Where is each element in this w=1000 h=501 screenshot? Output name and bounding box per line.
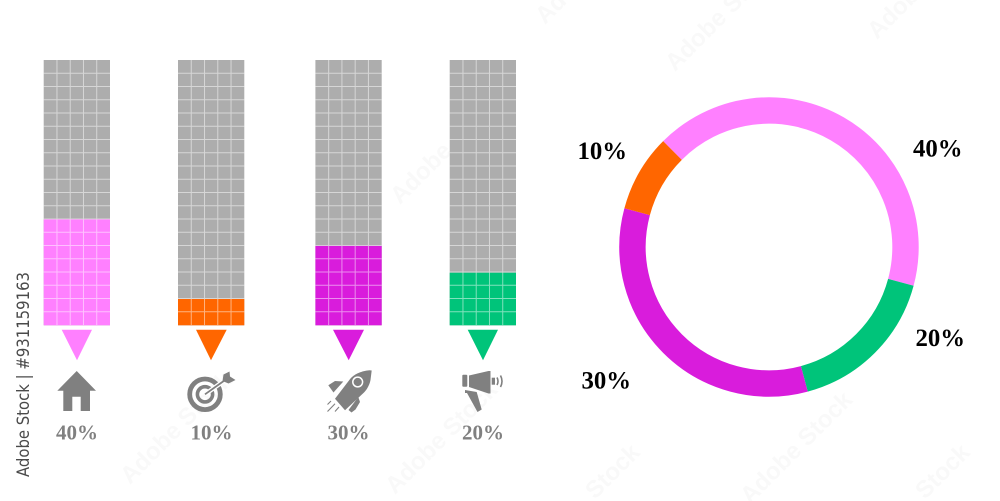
pointer: green triangle bbox=[468, 330, 498, 360]
pointer: magenta triangle bbox=[333, 330, 364, 360]
icon: rocket bbox=[328, 370, 372, 412]
segment: orange 10% bbox=[637, 150, 672, 212]
value label: 40%: 40% bbox=[56, 420, 98, 444]
icon: megaphone bbox=[462, 371, 502, 412]
bar: home track and fill bbox=[44, 60, 110, 325]
segment: magenta 30% bbox=[632, 212, 804, 384]
icon: house bbox=[57, 371, 96, 411]
icon: target with arrow bbox=[190, 372, 236, 410]
segment: green 20% bbox=[804, 282, 901, 379]
donut label: 30%: 30% bbox=[582, 368, 631, 395]
side credit: stock id: Adobe Stock | #931159163 bbox=[14, 272, 34, 477]
watermark: repeated faint stock text: Adobe Stock bbox=[115, 366, 238, 489]
donut label: 20%: 20% bbox=[916, 325, 965, 352]
pointer: orange triangle bbox=[196, 330, 227, 360]
value label: 30%: 30% bbox=[328, 420, 370, 444]
column: rocket 30% bbox=[315, 60, 382, 444]
column: target 10% bbox=[178, 60, 244, 444]
bar: megaphone track and fill bbox=[450, 60, 516, 325]
donut chart bbox=[632, 110, 906, 384]
watermark: repeated faint stock text: Adobe bbox=[385, 137, 457, 209]
column: megaphone 20% bbox=[450, 60, 516, 444]
donut label: 40%: 40% bbox=[913, 136, 963, 163]
pointer: pink triangle bbox=[62, 330, 92, 360]
value label: 20%: 20% bbox=[462, 420, 504, 444]
value label: 10%: 10% bbox=[190, 420, 232, 444]
watermark: repeated faint stock text: Adobe Stock bbox=[380, 376, 503, 499]
donut label: 10%: 10% bbox=[578, 138, 627, 165]
column: home 40% bbox=[44, 60, 110, 444]
segment: pink 40% bbox=[672, 110, 906, 282]
bar: rocket track and fill bbox=[315, 60, 382, 325]
bar: target track and fill bbox=[178, 60, 244, 325]
